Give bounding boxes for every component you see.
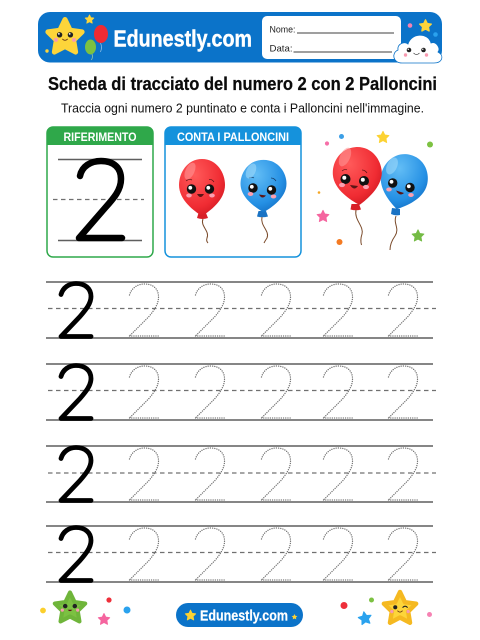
tracing row 1 [46,282,436,338]
panel heading: CONTA I PALLONCINI [177,132,289,144]
icon: small star [85,15,94,23]
reference numeral 2 [79,161,122,238]
panel heading: RIFERIMENTO [64,132,137,144]
tracing row 3 [46,446,436,502]
footer logo pill [176,603,303,627]
red balloon [179,159,225,243]
icon: red balloon [94,25,108,52]
header banner [38,12,442,63]
tracing row 2 [46,364,436,420]
solid numeral 2 [61,284,91,336]
blue balloon [240,160,286,243]
name and date box: Data: [270,44,292,54]
instruction text: Traccia ogni numero 2 puntinato e conta i Palloncini nell'immagine. [61,102,424,116]
tracing row 4 [46,526,436,582]
solid numeral 2 [61,366,91,418]
solid numeral 2 [61,528,91,580]
icon: blue star [357,611,372,625]
solid numeral 2 [61,448,91,500]
icon: yellow star mascot [384,592,416,623]
icon: green balloon [85,40,96,60]
confetti stars and dots [317,131,433,245]
icon: header star [420,20,431,31]
name and date box [262,16,401,59]
footer right decorations [340,592,432,625]
icon: green star mascot [55,592,85,621]
balloon illustration [317,131,433,250]
logo text: Edunestly.com [114,26,252,52]
icon: pill star right [292,614,297,619]
title: Scheda di tracciato del numero 2 con 2 Palloncini [48,74,437,94]
panel: riferimento [47,127,153,257]
big blue balloon [374,149,433,250]
footer left decorations [40,592,130,624]
icon: pill star left [185,610,196,620]
icon: pink star [98,614,110,624]
big red balloon [331,145,384,245]
footer logo text: Edunestly.com [200,608,288,624]
icon: yellow star mascot [48,20,82,52]
icon: cloud mascot [394,35,442,63]
name and date box: Nome: [270,24,296,34]
panel: conta i palloncini [165,127,301,257]
